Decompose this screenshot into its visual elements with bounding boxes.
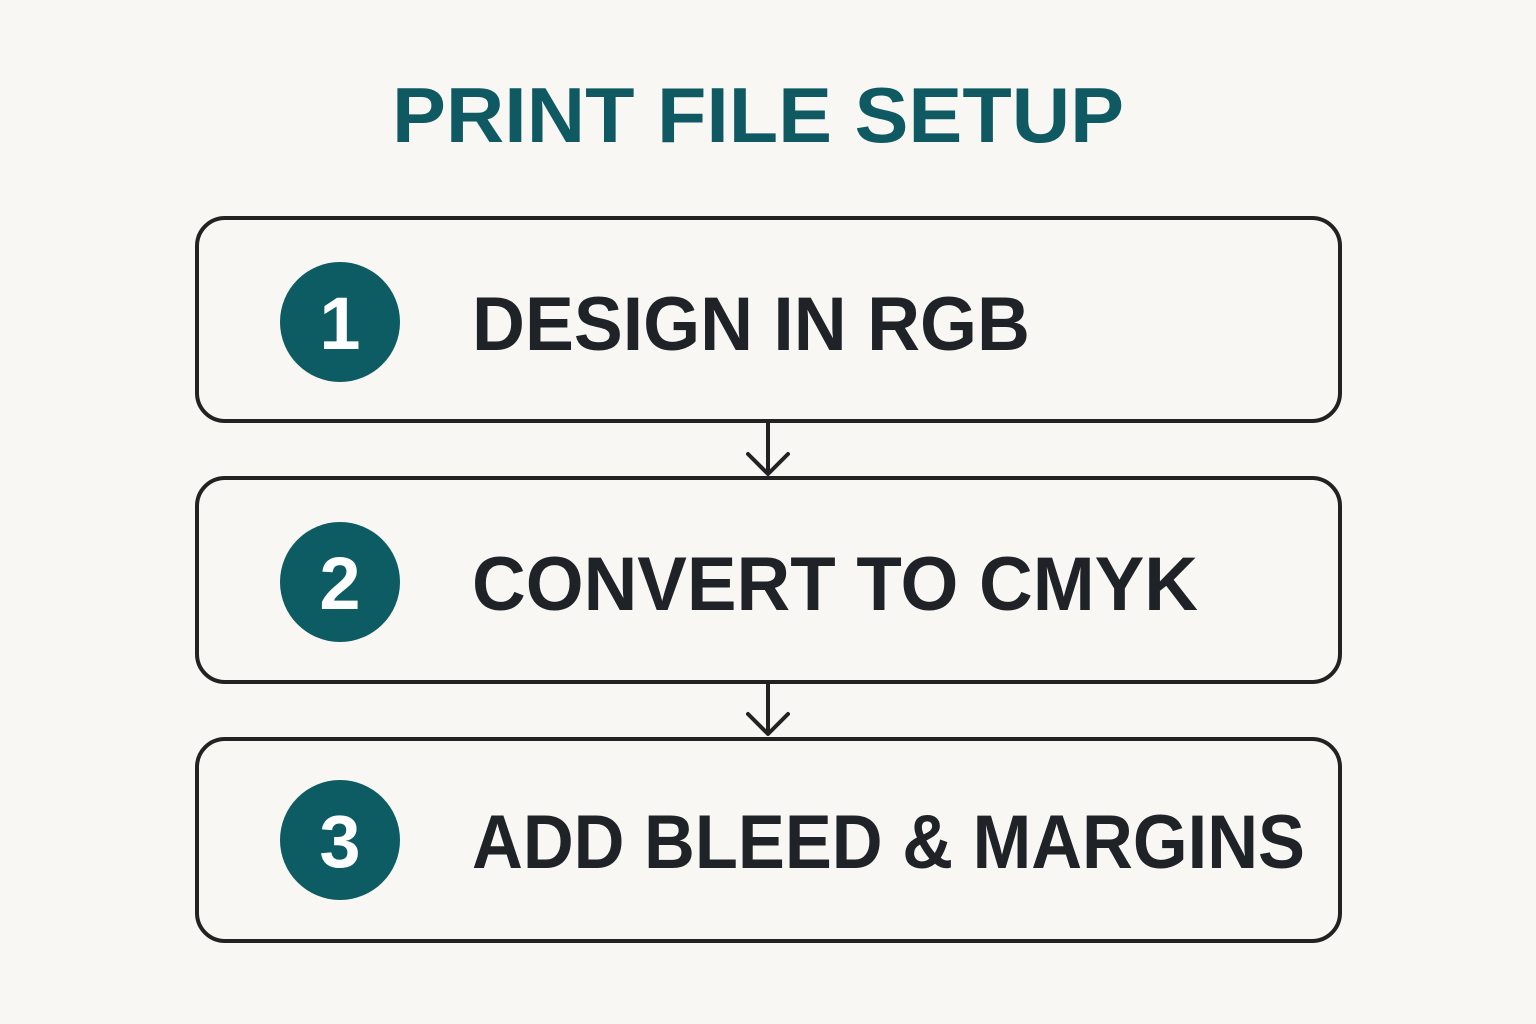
label: design in rgb: DESIGN IN RGB	[472, 282, 1030, 367]
icon: number 3 circle: 3	[319, 800, 361, 883]
step 3 box	[197, 739, 1340, 941]
step 2 box	[197, 478, 1340, 682]
label: add bleed & margins: ADD BLEED & MARGINS	[472, 800, 1305, 885]
icon: number 2 circle	[280, 522, 400, 642]
icon: number 2 circle: 2	[319, 542, 361, 625]
step 1 box	[197, 218, 1340, 421]
label: convert to cmyk: CONVERT TO CMYK	[472, 542, 1198, 627]
icon: number 1 circle	[280, 262, 400, 382]
arrow 2	[748, 684, 788, 734]
arrow 1	[748, 423, 788, 474]
icon: number 1 circle: 1	[319, 282, 361, 365]
title: PRINT FILE SETUP	[392, 71, 1124, 159]
icon: number 3 circle	[280, 780, 400, 900]
